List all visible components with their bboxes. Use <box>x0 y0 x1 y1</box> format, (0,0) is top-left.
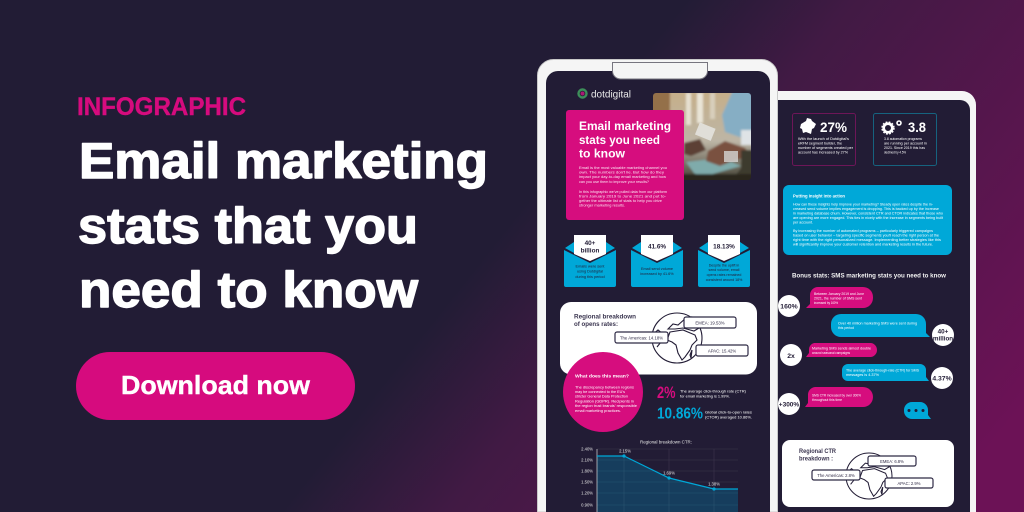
chart: regional breakdown CTR: 2.10% <box>581 458 593 462</box>
chart: regional breakdown CTR: 1.80% <box>581 468 593 474</box>
button: download now <box>76 352 355 420</box>
panel: putting insight into action: How can these insights help improve your marketing? Steady open rates despite the in- <box>793 202 934 206</box>
envelope stat: 40+ billion: during this period <box>575 275 605 279</box>
icon: globe <box>846 453 892 499</box>
envelope stat: 18.13%: send volume, email <box>709 268 740 272</box>
stat box: 27%: With the launch of Dotdigital's <box>798 137 849 141</box>
panel: pink title card: In this infographic we've pulled data from our platform <box>579 189 668 194</box>
bubble: 2x <box>780 343 877 366</box>
chart: regional breakdown CTR: Regional breakdown CTR: <box>640 440 692 444</box>
label: APAC <box>885 478 933 488</box>
eyebrow: infographic: INFOGRAPHIC <box>77 93 246 121</box>
panel: putting insight into action <box>783 185 952 255</box>
stat: 2% click-through rate: 2% <box>657 383 676 402</box>
envelope stat: 41.6% <box>631 235 683 287</box>
panel: pink title card: Email marketing <box>579 121 671 133</box>
callout: what does this mean: may be connected to the EU's <box>575 390 625 394</box>
panel: putting insight into action: based on user behavior – targeting specific segments you'll reach the right person at the <box>793 234 939 238</box>
bubble: 40+ million: this period <box>838 326 854 330</box>
panel: putting insight into action: are opening are more engaged. This ties in nicely with the increase in segments being built <box>793 216 943 220</box>
label: APAC: APAC: 2.9% <box>898 481 921 486</box>
sms chat: bonus stats conversation <box>778 287 954 419</box>
panel: pink title card: stronger marketing results. <box>579 202 625 208</box>
stat box: 3.8: 3.8 automation programs <box>884 137 922 141</box>
bubble: 40+ million: million <box>933 336 953 342</box>
bubble: 160%: increased by 160% <box>814 301 839 305</box>
stat box: 3.8: declined by 4.5% <box>884 150 907 154</box>
callout: what does this mean: The discrepancy between regions <box>575 386 634 390</box>
stat: 10.86% click-to-open: Global click-to-open rates <box>705 410 752 414</box>
label: APAC: APAC: 15.42% <box>708 348 736 354</box>
chart: regional breakdown CTR: 1.38% <box>708 482 720 486</box>
callout: what does this mean: What does this mean? <box>575 374 629 378</box>
label: EMEA <box>684 317 736 328</box>
label: The Americas <box>615 332 668 343</box>
main heading: stats that you <box>78 198 418 254</box>
envelope stat: 18.13% <box>698 235 750 287</box>
panel: regional CTR breakdown: Regional CTR <box>799 448 836 455</box>
panel: pink title card <box>566 110 684 220</box>
envelope stat: 41.6%: Email send volume <box>641 267 673 271</box>
stat: 2% click-through rate <box>657 383 747 402</box>
label: APAC <box>696 345 748 356</box>
label: The Americas: The Americas: 14.18% <box>620 336 663 340</box>
bubble: 2x: around seasonal campaigns <box>812 351 850 355</box>
main heading: Email marketing <box>79 133 488 189</box>
icon: gears <box>882 121 901 134</box>
chart: regional breakdown CTR: 1.69% <box>663 470 675 476</box>
bubble: 2x: Marketing SMS sends almost double <box>812 346 871 350</box>
panel: pink title card: can you use them to improve your results? <box>579 179 650 184</box>
phone 1: first infographic page <box>538 60 778 512</box>
stat: 10.86% click-to-open <box>657 406 752 422</box>
bubble: 40+ million: Over 40 million marketing SMS were sent during <box>838 322 917 326</box>
label: The Americas: The Americas: 2.8% <box>817 473 855 478</box>
stat: 2% click-through rate: for email marketing is 1.99%. <box>680 394 730 398</box>
stat box: 27%: 27% <box>820 119 848 135</box>
main heading <box>78 133 488 318</box>
panel: regional breakdown of opens rates <box>560 302 757 374</box>
panel: putting insight into action: By increasing the number of automated programs – particularly triggered campaigns <box>793 229 933 233</box>
callout: what does this mean: Regulation (GDPR). Recipients in <box>575 400 634 404</box>
panel: putting insight into action: right time with the right personalized message. Implementing better strategies like this <box>793 238 941 242</box>
chart: regional breakdown CTR: 2.40% <box>581 446 593 452</box>
envelope stat: 18.13%: consistent around 18% <box>706 278 743 282</box>
panel: pink title card: impact your day-to-day email marketing and how <box>579 174 666 179</box>
envelope stat: 40+ billion <box>564 235 616 287</box>
stat box: 27%: eRFM segment builder, the <box>798 142 842 146</box>
notch <box>612 62 708 79</box>
stat box: 3.8 <box>874 114 936 166</box>
panel: putting insight into action: per account. <box>793 220 813 224</box>
label: The Americas <box>812 470 860 480</box>
bubble: 2x: 2x <box>787 353 795 360</box>
icon: globe <box>652 313 702 363</box>
panel: pink title card: to know <box>579 148 625 160</box>
bubble: +300%: +300% <box>779 402 799 408</box>
bubble: +300%: throughout this time <box>812 398 842 402</box>
bubble: +300%: SMS CTR increased by over 300% <box>812 394 862 398</box>
panel: regional CTR breakdown <box>782 440 954 507</box>
main heading: need to know <box>79 262 418 318</box>
label: EMEA: EMEA: 6.8% <box>880 459 904 464</box>
bubble: 40+ million <box>831 314 954 346</box>
stat box: 27% <box>792 114 856 166</box>
bubble: 4.37%: The average click-through-rate (CTR) for SMS <box>846 368 920 372</box>
panel: pink title card: Email is the most valuable marketing channel you <box>579 165 667 170</box>
stat: 2% click-through rate: The average click-through rate (CTR) <box>680 390 747 394</box>
stat box: 3.8: are running per account in <box>884 142 927 146</box>
envelope stat: 18.13%: Despite the uplift in <box>709 264 739 268</box>
chart: regional breakdown CTR <box>581 440 738 512</box>
panel: pink title card: own. The numbers don't lie. But how do they <box>579 170 664 174</box>
panel: putting insight into action: will significantly improve your customer retention and marketing results in the future. <box>793 242 933 246</box>
bubble: 40+ million: 40+ <box>938 328 949 336</box>
stat box: 3.8: 2021. Since 2019 this has <box>884 146 925 150</box>
chart: regional breakdown CTR: 1.20% <box>581 490 593 496</box>
phone 2: second infographic page <box>770 91 976 512</box>
label: EMEA: EMEA: 19.53% <box>695 320 725 326</box>
panel: pink title card: from January 2019 to June 2021 and put to- <box>579 194 667 198</box>
icon: puzzle piece <box>800 118 816 134</box>
envelope stat: 41.6%: 41.6% <box>648 244 666 250</box>
label: EMEA <box>868 456 916 466</box>
envelope stat: 40+ billion: 40+ <box>585 240 596 247</box>
callout: what does this mean <box>563 352 643 432</box>
stat box: 27%: account has increased by 27% <box>798 150 849 154</box>
bubble: 4.37%: messages is 4.37% <box>846 373 880 377</box>
stat box: 3.8: 3.8 <box>908 119 926 135</box>
stat: 10.86% click-to-open: 10.86% <box>657 406 703 422</box>
logo: dotdigital: dotdigital <box>591 88 631 100</box>
envelope stat: 18.13%: opens rates remained <box>707 273 741 277</box>
heading: bonus stats: Bonus stats: SMS marketing stats you need to know <box>792 272 947 280</box>
panel: pink title card: stats you need <box>579 135 660 147</box>
button: download now: Download now <box>121 370 311 400</box>
envelope stat: 18.13%: 18.13% <box>713 244 735 250</box>
envelope stat: 41.6%: increased by 41.6% <box>640 272 674 276</box>
panel: putting insight into action: Putting insight into action <box>793 194 845 198</box>
chart: regional breakdown CTR: 2.15% <box>619 448 631 454</box>
stat: 10.86% click-to-open: (CTOR) averaged 10.86%. <box>705 416 752 420</box>
bubble: 160%: 2021, the number of SMS sent <box>814 296 862 300</box>
bubble: 4.37% <box>842 364 953 389</box>
panel: pink title card: gether the ultimate list of stats to help you drive <box>579 198 663 203</box>
bubble: 4.37%: 4.37% <box>932 376 952 382</box>
chart: regional breakdown CTR: 1.50% <box>581 480 593 484</box>
panel: regional breakdown of opens rates: Regional breakdown <box>574 314 636 320</box>
callout: what does this mean: stricter General Data Protection <box>575 394 628 398</box>
callout: what does this mean: the region trust brands' responsible <box>575 404 637 408</box>
panel: regional breakdown of opens rates: of opens rates: <box>574 321 618 328</box>
envelope stat: 40+ billion: using Dotdigital <box>577 270 603 274</box>
photo: hands on laptop <box>653 93 751 180</box>
bubble: 160%: Between January 2019 and June <box>814 292 864 296</box>
callout: what does this mean: email marketing practices. <box>575 409 621 413</box>
envelope stat: 40+ billion: billion <box>581 248 599 254</box>
bubble: +300% <box>778 387 873 415</box>
envelope stat: 40+ billion: Emails were sent <box>576 264 605 268</box>
stat box: 27%: number of segments created per <box>798 146 854 150</box>
bubble: 160% <box>778 287 873 317</box>
bubble: typing dots <box>904 402 931 419</box>
panel: putting insight into action: in marketing database churn. However, consistent CTR and CTOR indicates that those who <box>793 212 943 216</box>
bubble: 160%: 160% <box>780 304 798 310</box>
panel: regional CTR breakdown: breakdown : <box>799 456 833 462</box>
panel: putting insight into action: creased send volume implies engagement is dropping. This is backed up by the increase <box>793 207 939 211</box>
chart: regional breakdown CTR: 0.90% <box>581 502 593 508</box>
